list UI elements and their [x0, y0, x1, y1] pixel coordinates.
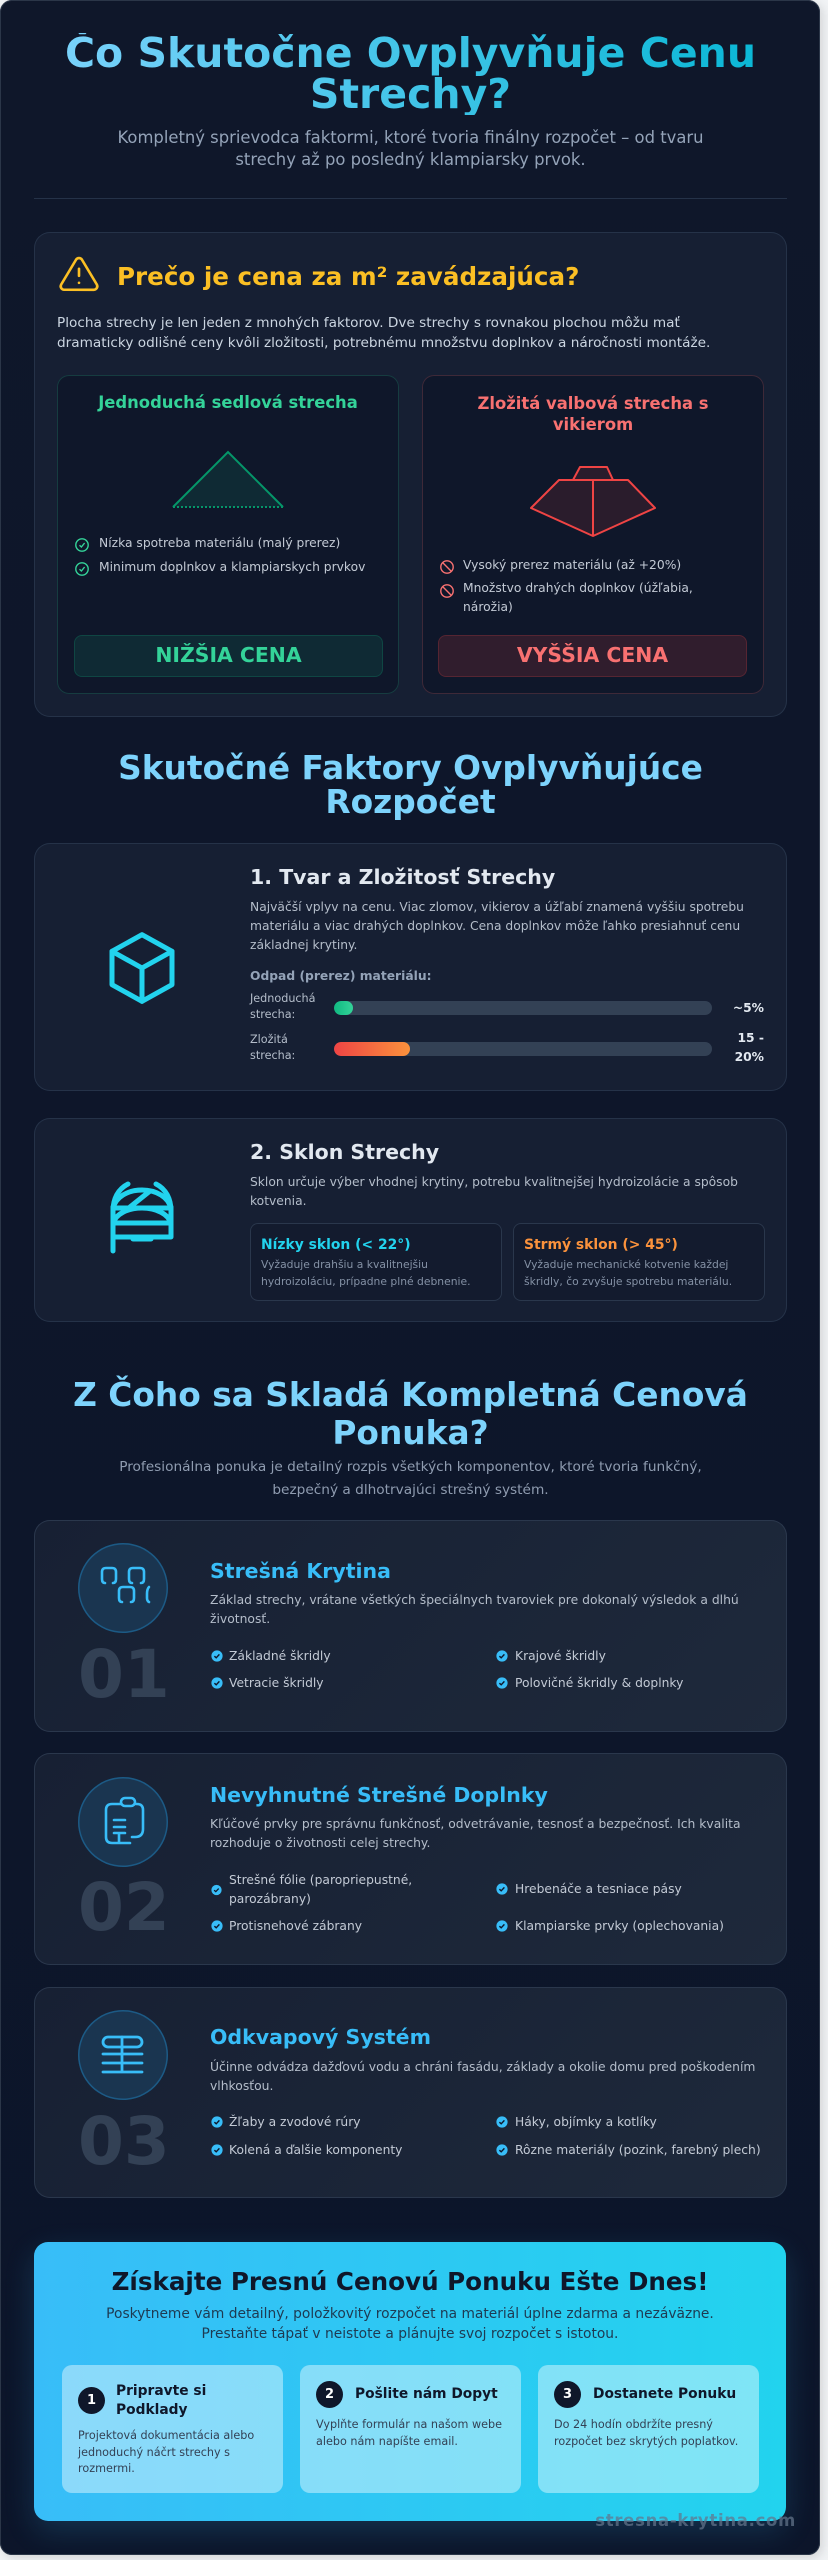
list item: Základné škridly [229, 1649, 331, 1663]
card heading: Nízky sklon (< 22°) [261, 1237, 411, 1253]
card heading: Jednoduchá sedlová strecha [98, 393, 358, 412]
step text [316, 2417, 502, 2450]
panel: gutter system [34, 1987, 787, 2198]
factor description [250, 1175, 738, 1208]
service description: Základ strechy, vrátane všetkých špeciálnych tvaroviek pre dokonalý výsledok a dlhú [210, 1593, 739, 1607]
bar label [249, 992, 316, 1021]
step heading: Pripravte si [116, 2383, 206, 2399]
step text [554, 2417, 738, 2450]
list item [211, 1873, 412, 1906]
step text: Do 24 hodín obdržíte presný [554, 2418, 713, 2431]
list item: Vetracie škridly [229, 1676, 324, 1690]
service description: Účinne odvádza dažďovú vodu a chráni fasádu, základy a okolie domu pred poškodením [210, 2060, 755, 2074]
service description: rozhoduje o životnosti celej strechy. [210, 1836, 430, 1850]
step number: 2 [325, 2387, 334, 2402]
chart title: Odpad (prerez) materiálu: [250, 969, 432, 983]
bar value [735, 1031, 764, 1064]
panel: roof pitch [34, 1118, 787, 1322]
section description: bezpečný a dlhotrvajúci strešný systém. [272, 1482, 549, 1498]
step 3 card [538, 2365, 759, 2493]
service description: životnosť. [210, 1612, 270, 1626]
step number [316, 2381, 343, 2408]
list item: Strešné fólie (paropriepustné, [229, 1873, 412, 1887]
factor description: kotvenia. [250, 1194, 307, 1208]
drawback item [440, 581, 693, 614]
panel: why price per m2 is misleading [34, 232, 787, 717]
section heading: real factors: Rozpočet [325, 783, 496, 821]
card: steep pitch [513, 1223, 765, 1301]
bar: simple roof 5% [334, 1001, 712, 1015]
cta text: Prestaňte tápať v neistote a plánujte svoj rozpočet s istotou. [202, 2326, 618, 2342]
subtitle: Kompletný sprievodca faktormi, ktoré tvoria finálny rozpočet – od tvaru [117, 128, 704, 147]
bar label [250, 1033, 295, 1062]
benefit item: Minimum doplnkov a klampiarskych prvkov [99, 560, 365, 574]
bar value: 20% [735, 1050, 764, 1064]
card heading: vikierom [553, 415, 633, 434]
cta text [106, 2306, 714, 2342]
step heading: Dostanete Ponuku [593, 2386, 736, 2402]
card text: Vyžaduje mechanické kotvenie každej [524, 1258, 728, 1271]
section heading: real factors [118, 749, 703, 821]
step text: Projektová dokumentácia alebo [78, 2429, 254, 2442]
drawback item: nárožia) [463, 600, 513, 614]
number 01: 01 [78, 1636, 170, 1713]
card text: škridly, čo zvyšuje spotrebu materiálu. [524, 1275, 732, 1288]
service description [210, 2059, 755, 2093]
price badge: VYŠŠIA CENA [517, 643, 668, 667]
list item: Háky, objímky a kotlíky [515, 2115, 657, 2129]
panel: complex hip roof [422, 375, 764, 694]
list item: parozábrany) [229, 1892, 311, 1906]
factor description: základnej krytiny. [250, 938, 357, 952]
icon: cube [110, 932, 174, 1004]
panel: roof shape and complexity [34, 843, 787, 1091]
section description [119, 1459, 702, 1498]
price badge: NIŽŠIA CENA [155, 643, 302, 667]
list item: Krajové škridly [515, 1649, 606, 1663]
card heading: Strmý sklon (> 45°) [524, 1237, 678, 1253]
step heading: Podklady [116, 2402, 188, 2418]
step number: 1 [87, 2393, 96, 2408]
intro text: Plocha strechy je len jeden z mnohých faktorov. Dve strechy s rovnakou plochou môžu mať [57, 315, 680, 331]
number 03: 03 [78, 2103, 170, 2180]
icon: gable roof triangle [172, 450, 284, 508]
number 02: 02 [78, 1869, 170, 1946]
service description: Kľúčové prvky pre správnu funkčnosť, odvetrávanie, tesnosť a bezpečnosť. Ich kvalita [210, 1817, 741, 1831]
bar label: strecha: [250, 1049, 295, 1062]
step 2 card [300, 2365, 521, 2493]
card heading: Zložitá valbová strecha s [477, 394, 709, 413]
intro text [57, 315, 710, 350]
step text [78, 2428, 254, 2478]
card text [261, 1258, 471, 1288]
title: Čo Skutočne Ovplyvňuje Cenu [65, 29, 756, 77]
title [34, 33, 787, 115]
service heading: Nevyhnutné Strešné Doplnky [210, 1783, 548, 1807]
section heading: real factors: Skutočné Faktory Ovplyvňujúce [118, 749, 703, 787]
list item: Hrebenáče a tesniace pásy [515, 1882, 682, 1896]
factor heading: 1. Tvar a Zložitosť Strechy [250, 865, 555, 889]
icon: warning triangle [59, 256, 99, 292]
step text: rozpočet bez skrytých poplatkov. [554, 2434, 738, 2448]
icon: roof tiles [78, 1543, 168, 1633]
step number [554, 2381, 581, 2408]
icon: clipboard [78, 1777, 168, 1867]
price badge [74, 635, 383, 677]
panel: roof accessories [34, 1753, 787, 1965]
step heading [116, 2383, 206, 2418]
service heading: Odkvapový Systém [210, 2025, 431, 2049]
panel: call to action [34, 2242, 786, 2521]
service description [210, 1593, 739, 1626]
step text: Vyplňte formulár na našom webe [316, 2418, 502, 2431]
step text: rozmermi. [78, 2462, 135, 2475]
card text [524, 1258, 732, 1288]
icon: hip roof with dormer [530, 466, 656, 537]
list item: Kolená a ďalšie komponenty [229, 2143, 402, 2157]
watermark: stresna-krytina.com [595, 2511, 796, 2530]
service heading: Strešná Krytina [210, 1559, 391, 1583]
step heading: Pošlite nám Dopyt [355, 2386, 498, 2402]
section heading: complete quote: Ponuka? [332, 1414, 489, 1452]
panel: roofing [34, 1520, 787, 1732]
step text: alebo nám napíšte email. [316, 2434, 458, 2448]
list item: Žľaby a zvodové rúry [229, 2115, 361, 2129]
card text: Vyžaduje drahšiu a kvalitnejšiu [261, 1258, 428, 1271]
bar label: strecha: [250, 1008, 295, 1021]
service description: vlhkosťou. [210, 2079, 273, 2093]
section heading: complete quote [73, 1376, 748, 1452]
panel heading: Prečo je cena za m² zavádzajúca? [117, 262, 579, 291]
bar value: 15 - [738, 1031, 764, 1045]
drawback item: Vysoký prerez materiálu (až +20%) [463, 558, 681, 572]
list item: Protisnehové zábrany [229, 1919, 362, 1933]
subtitle: strechy až po posledný klampiarsky prvok. [235, 150, 586, 169]
step text: jednoduchý náčrt strechy s [78, 2446, 230, 2458]
bar: complex roof 15-20% [334, 1042, 712, 1056]
factor description: Sklon určuje výber vhodnej krytiny, potrebu kvalitnejšej hydroizolácie a spôsob [250, 1175, 738, 1189]
factor heading: 2. Sklon Strechy [250, 1140, 439, 1164]
factor description: materiálu a viac drahých doplnkov. Cena doplnkov môže ľahko presiahnuť cenu [250, 919, 740, 933]
cta heading: Získajte Presnú Cenovú Ponuku Ešte Dnes! [112, 2267, 708, 2296]
icon: pitch arcs [110, 1182, 174, 1254]
factor description [250, 900, 744, 952]
icon: gutter [78, 2010, 168, 2100]
factor description: Najväčší vplyv na cenu. Viac zlomov, vikierov a úžľabí znamená vyššiu spotrebu [250, 900, 744, 914]
bar value: ~5% [733, 1001, 764, 1015]
list item: Klampiarske prvky (oplechovania) [515, 1919, 724, 1933]
section description: Profesionálna ponuka je detailný rozpis všetkých komponentov, ktoré tvoria funkčný, [119, 1459, 702, 1475]
drawback item: Množstvo drahých doplnkov (úžľabia, [463, 581, 693, 595]
list item: Polovičné škridly & doplnky [515, 1676, 683, 1690]
subtitle [117, 128, 704, 169]
list item: Rôzne materiály (pozink, farebný plech) [515, 2143, 761, 2157]
step 1 card [62, 2365, 283, 2493]
card: low pitch [250, 1223, 502, 1301]
cta text: Poskytneme vám detailný, položkovitý rozpočet na materiál úplne zdarma a nezáväzne. [106, 2306, 714, 2322]
bar label: Zložitá [250, 1033, 288, 1046]
section heading: complete quote: Z Čoho sa Skladá Kompletná Cenová [73, 1376, 748, 1414]
intro text: dramaticky odlišné ceny kvôli zložitosti, potrebnému množstvu doplnkov a náročnosti montáže. [57, 334, 710, 350]
benefit item: Nízka spotreba materiálu (malý prerez) [99, 536, 340, 550]
card heading [477, 394, 709, 434]
step number [78, 2387, 105, 2414]
service description [210, 1817, 741, 1850]
bar label: Jednoduchá [250, 992, 316, 1005]
title: Strechy? [310, 70, 511, 118]
panel: simple gable roof [57, 375, 399, 694]
step number: 3 [563, 2387, 572, 2402]
price badge [438, 635, 747, 677]
card text: hydroizoláciu, prípadne plné debnenie. [261, 1275, 471, 1288]
bar chart: material waste [249, 969, 764, 1064]
